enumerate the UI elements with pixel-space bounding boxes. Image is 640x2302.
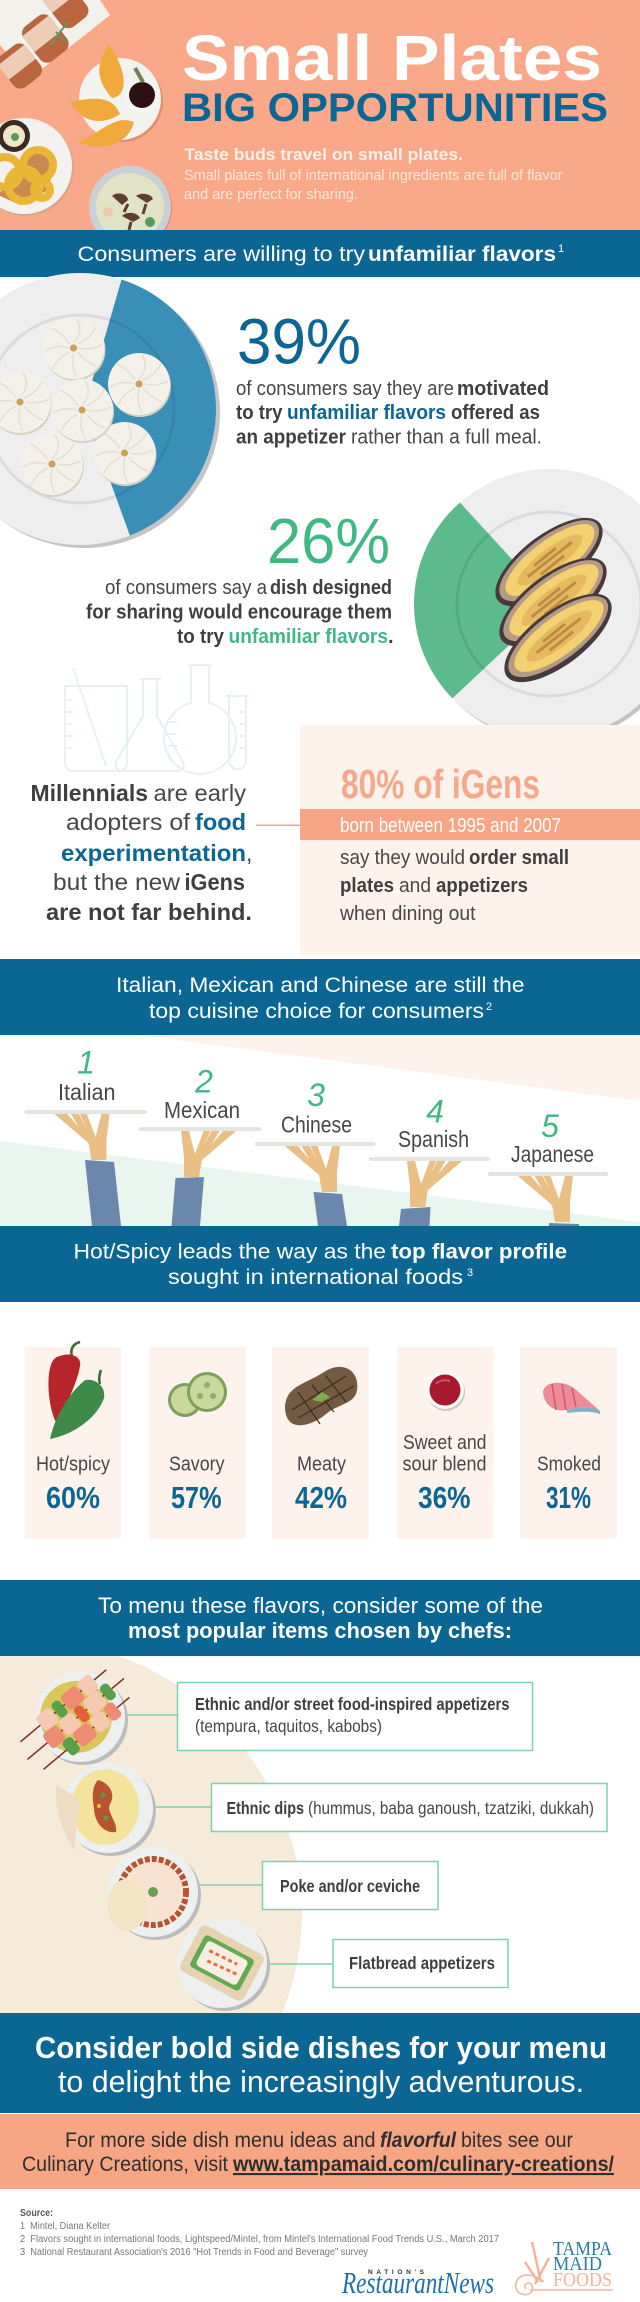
- sources: 3 National Restaurant Association's 2016 "Hot Trends in Food and Beverage" survey: [20, 2247, 368, 2258]
- millennials text: are not far behind.: [46, 899, 252, 925]
- section band: chef items: most popular items chosen by chefs:: [128, 1618, 512, 1643]
- section band: unfamiliar flavors: Consumers are willing to try: [78, 243, 366, 266]
- millennials text: Millennials: [30, 780, 148, 806]
- logo: Nation's Restaurant News: NATION'S: [368, 2269, 425, 2276]
- dumpling plate with 39% wedge: [0, 273, 220, 548]
- section band: flavor profile: 3: [467, 1267, 473, 1279]
- millennials text: food: [195, 809, 246, 835]
- section band: top cuisines: top cuisine choice for consumers: [149, 1000, 484, 1023]
- flavor card: hot/spicy: 60%: [46, 1480, 100, 1515]
- dish: skewers: [10, 1658, 141, 1780]
- section band: flavor profile: Hot/Spicy leads the way as the: [74, 1240, 386, 1264]
- logo: Nation's Restaurant News: RestaurantNews: [341, 2265, 494, 2300]
- flavor card: smoked: Smoked: [537, 1454, 601, 1476]
- title: [182, 22, 608, 130]
- stat: 39%: offered as: [451, 402, 540, 424]
- stat: 26%: 26%: [267, 505, 390, 577]
- icon: steak: [285, 1367, 357, 1425]
- section band: top cuisines: Italian, Mexican and Chinese are still the: [116, 974, 524, 997]
- soup bowl: [89, 166, 172, 230]
- tan table background: [0, 1656, 302, 2013]
- stat: 39%: to try: [236, 402, 283, 424]
- section band: flavor profile: [0, 1226, 640, 1302]
- call to action band: [0, 2114, 640, 2189]
- stat: 39%: unfamiliar flavors: [287, 402, 446, 424]
- title: Small Plates: [182, 22, 602, 94]
- dish: flatbread: [177, 1918, 270, 2011]
- subtitle text: Taste buds travel on small plates.: [184, 145, 463, 164]
- millennials text: adopters of: [66, 809, 191, 835]
- food tray with bacon rolls: [0, 0, 110, 92]
- arm 2 Mexican: Mexican: [164, 1097, 240, 1123]
- millennials text: but the new: [53, 869, 180, 895]
- subtitle text: Small plates full of international ingredients are full of flavor: [184, 168, 563, 184]
- logo: Tampa Maid Foods: [516, 2238, 613, 2295]
- panel: 80% of iGens: appetizers: [436, 875, 528, 897]
- stat: 26%: for sharing would encourage them: [86, 602, 392, 624]
- flavor card: meaty: 42%: [295, 1480, 347, 1515]
- stat: 39%: 39%: [237, 306, 361, 378]
- mussel plate with 26% wedge: [414, 469, 640, 725]
- cuisine background shapes: [0, 1035, 640, 1226]
- connector lines: [124, 1715, 333, 1964]
- callout: poke: [262, 1862, 438, 1910]
- sources: Source:: [20, 2208, 53, 2219]
- connector line: [256, 824, 300, 826]
- arm 1 Italian: Italian: [58, 1079, 116, 1105]
- flavor card: meaty: Meaty: [297, 1454, 346, 1476]
- arm 2 Mexican: [139, 1064, 261, 1226]
- section band: unfamiliar flavors: 1: [558, 243, 564, 255]
- logo: Tampa Maid Foods: TAMPA: [553, 2238, 612, 2260]
- arm 4 Spanish: [369, 1094, 490, 1226]
- logo: Tampa Maid Foods: MAID: [553, 2253, 602, 2275]
- subtitle text: [184, 145, 563, 203]
- sources: 1 Mintel, Diana Kelter: [20, 2221, 111, 2232]
- stat: 39%: [236, 306, 549, 448]
- arm 3 Chinese: [255, 1077, 376, 1226]
- stat: 26%: of consumers say a: [105, 577, 268, 599]
- call to action band: bites see our: [461, 2129, 573, 2152]
- callout: street food appetizers: Ethnic and/or street food-inspired appetizers: [195, 1694, 510, 1714]
- section band: chef items: [0, 1580, 640, 1656]
- flavor card: savory: [149, 1347, 246, 1539]
- arm 1 Italian: 1: [77, 1044, 95, 1080]
- flavor card: hot/spicy: Hot/spicy: [36, 1454, 110, 1476]
- flavor card: sweet and sour: sour blend: [402, 1454, 486, 1476]
- icon: fork, knife and swirl: [516, 2242, 613, 2295]
- stat: 26%: dish designed: [270, 577, 392, 599]
- flavor card: hot/spicy: [24, 1342, 121, 1539]
- icon: lab glassware: [65, 665, 249, 774]
- sources: 2 Flavors sought in international foods, Lightspeed/Mintel, from Mintel's International Food Trends U.S., March 2017: [20, 2234, 499, 2245]
- closing band: Consider bold side dishes for your menu: [35, 2030, 607, 2065]
- call to action band: For more side dish menu ideas and: [65, 2129, 376, 2152]
- callout: ethnic dips: Ethnic dips: [226, 1798, 304, 1818]
- call to action band: flavorful: [380, 2129, 457, 2152]
- flavor card: sweet and sour: 36%: [418, 1480, 470, 1515]
- dish: hummus and pita: [56, 1763, 156, 1856]
- flavor card: meaty: [272, 1347, 369, 1539]
- panel: 80% of iGens: when dining out: [339, 903, 476, 925]
- arm 4 Spanish: Spanish: [398, 1126, 469, 1152]
- millennials text: ,: [246, 840, 252, 866]
- flavor card: smoked: [520, 1347, 617, 1539]
- flavor card: savory: 57%: [171, 1480, 222, 1515]
- callout: ethnic dips: (hummus, baba ganoush, tzatziki, dukkah): [308, 1798, 594, 1818]
- icon: peppers: [48, 1342, 104, 1439]
- stat: 39%: of consumers say they are: [236, 378, 454, 400]
- panel: 80% of iGens: plates: [340, 875, 394, 897]
- section band: top cuisines: 2: [486, 1001, 492, 1013]
- millennials text: [30, 780, 252, 925]
- section band: unfamiliar flavors: unfamiliar flavors: [368, 243, 556, 266]
- arm 5 Japanese: Japanese: [511, 1141, 594, 1167]
- shrimp plate: [70, 44, 163, 147]
- arm 5 Japanese: 5: [541, 1108, 559, 1144]
- section band: unfamiliar flavors: [0, 230, 640, 277]
- panel: 80% of iGens: and: [399, 875, 431, 897]
- panel: 80% of iGens: order small: [469, 847, 569, 869]
- sources: [20, 2208, 499, 2258]
- stat: 26%: [86, 505, 394, 648]
- flavor card: sweet and sour: Sweet and: [403, 1432, 486, 1454]
- stat: 26%: .: [388, 626, 394, 648]
- icon: sauce cup: [426, 1371, 465, 1411]
- subtitle text: and are perfect for sharing.: [184, 187, 358, 203]
- callout bar: [300, 809, 640, 840]
- section band: top cuisines: [0, 959, 640, 1035]
- millennials text: iGens: [184, 869, 245, 895]
- icon: cucumber slices: [168, 1372, 227, 1417]
- call to action band: Culinary Creations, visit: [22, 2153, 228, 2176]
- arm 2 Mexican: 2: [194, 1064, 213, 1100]
- call to action band: www.tampamaid.com/culinary-creations/: [232, 2153, 614, 2176]
- flavor card: sweet and sour: [397, 1347, 494, 1539]
- section band: flavor profile: sought in international foods: [168, 1266, 463, 1289]
- callout: street food appetizers: [178, 1682, 532, 1750]
- flavor card: savory: Savory: [169, 1454, 224, 1476]
- closing band: [0, 2013, 640, 2113]
- dish: poke: [107, 1847, 201, 1940]
- arm 3 Chinese: 3: [307, 1077, 325, 1113]
- title: BIG OPPORTUNITIES: [182, 86, 608, 130]
- flavor card: smoked: 31%: [546, 1480, 591, 1515]
- arm 1 Italian: [24, 1044, 147, 1226]
- logo: Tampa Maid Foods: FOODS: [553, 2269, 612, 2291]
- arm 3 Chinese: Chinese: [281, 1112, 352, 1138]
- stat: 39%: an appetizer: [236, 426, 346, 448]
- closing band: to delight the increasingly adventurous.: [58, 2064, 584, 2099]
- stat: 26%: unfamiliar flavors: [228, 626, 388, 648]
- panel: 80% of iGens: say they would: [340, 847, 465, 869]
- section band: flavor profile: top flavor profile: [391, 1240, 567, 1264]
- callout: flatbread: Flatbread appetizers: [349, 1953, 495, 1973]
- panel: 80% of iGens: born between 1995 and 2007: [340, 815, 561, 837]
- panel: 80% of iGens: [256, 725, 640, 955]
- icon: salmon: [543, 1383, 600, 1414]
- arm 5 Japanese: [488, 1108, 608, 1226]
- arm 4 Spanish: 4: [426, 1094, 444, 1130]
- stat: 39%: motivated: [457, 378, 549, 400]
- onion rings plate: [0, 118, 74, 216]
- stat: 39%: rather than a full meal.: [351, 426, 542, 448]
- panel: 80% of iGens: 80% of iGens: [341, 761, 540, 807]
- stat: 26%: to try: [177, 626, 225, 648]
- millennials text: are early: [154, 780, 247, 806]
- callout: flatbread: [333, 1940, 508, 1988]
- section band: chef items: To menu these flavors, consider some of the: [98, 1593, 543, 1618]
- header panel: [0, 0, 640, 249]
- callout: street food appetizers: (tempura, taquitos, kabobs): [195, 1716, 382, 1736]
- millennials text: experimentation: [61, 840, 246, 866]
- callout: ethnic dips: [212, 1784, 607, 1832]
- callout: poke: Poke and/or ceviche: [280, 1876, 420, 1896]
